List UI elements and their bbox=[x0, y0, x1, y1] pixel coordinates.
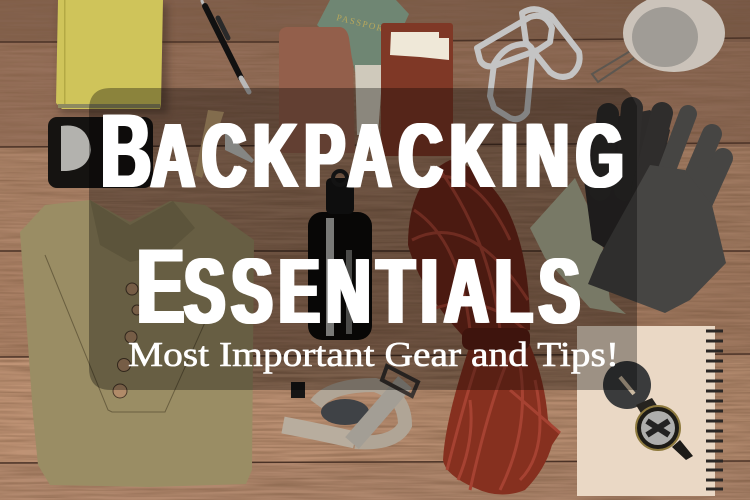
subtitle: Most Important Gear and Tips! bbox=[128, 335, 619, 374]
item: gloves bbox=[580, 108, 726, 313]
item: passport bbox=[317, 0, 409, 75]
item: black bottle bbox=[308, 171, 372, 340]
item: spiral notebook and compass bbox=[577, 326, 723, 496]
item: rope bbox=[408, 160, 560, 495]
item: belt bbox=[283, 366, 418, 443]
sweater buttons bbox=[113, 283, 142, 398]
dark translucent title panel bbox=[89, 88, 637, 390]
item: receipts bbox=[355, 65, 383, 135]
item: folding knife bbox=[195, 110, 254, 178]
item: green map bbox=[530, 178, 626, 314]
item: brown wallet bbox=[279, 27, 355, 153]
item: sweater bbox=[20, 200, 254, 487]
notebook spiral bbox=[706, 331, 723, 489]
compass bbox=[603, 361, 693, 460]
item: metal cup bbox=[592, 0, 725, 82]
item: red wallet bbox=[381, 23, 453, 156]
title line: Backpacking: BACKPACKING bbox=[101, 93, 631, 210]
title line: Essentials: ESSENTIALS bbox=[137, 226, 586, 346]
item: pen bbox=[202, 1, 249, 92]
item: passport lettering: PASSPORT bbox=[336, 12, 391, 35]
item: carabiners bbox=[477, 9, 580, 119]
item: yellow notebook bbox=[56, 0, 168, 114]
item: black device bbox=[48, 117, 153, 188]
